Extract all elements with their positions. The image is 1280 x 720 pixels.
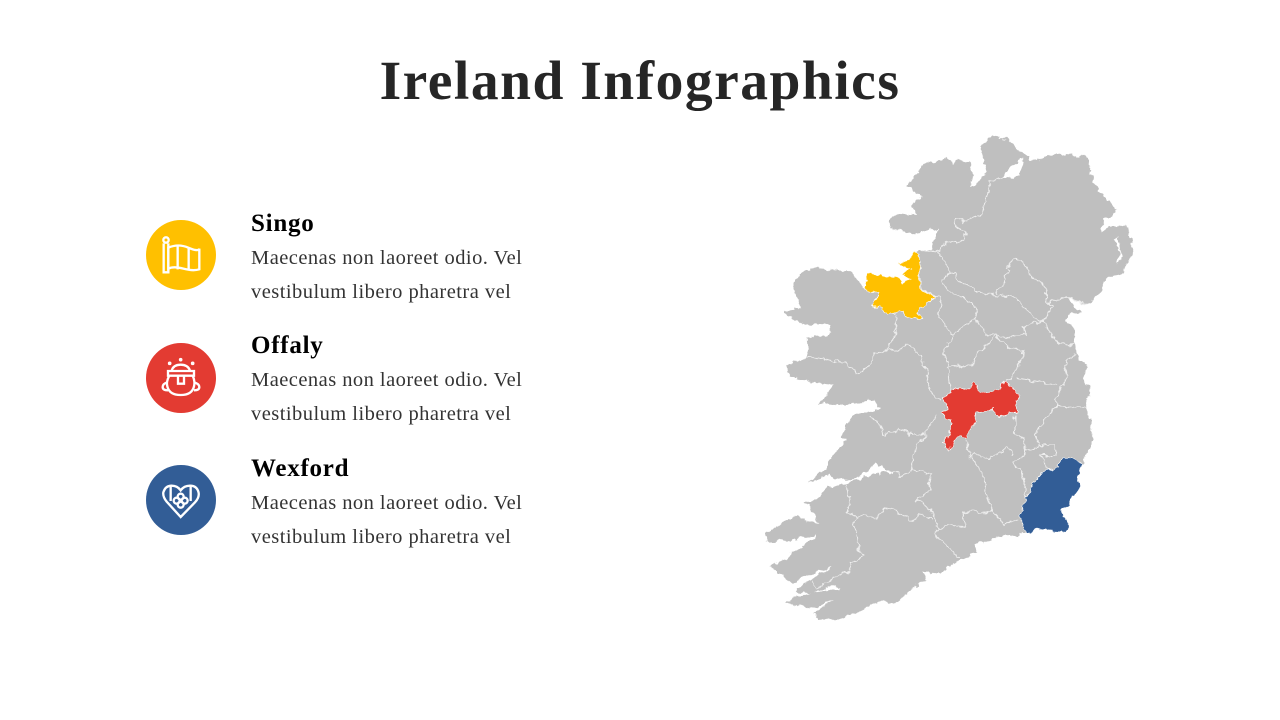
text block: Wexford: Wexford — [251, 455, 349, 482]
text block: Singo: Singo — [251, 210, 315, 237]
map: Lough Foyle and Strangford Lough — [1000, 159, 1122, 263]
text block: Offaly — [251, 332, 522, 425]
map: Offaly highlighted in red — [942, 382, 1020, 451]
text block: Singo — [251, 210, 522, 303]
text block: Offaly: Offaly — [251, 332, 324, 359]
text block: Offaly: Maecenas non laoreet odio. Vel — [251, 369, 522, 391]
text block: Wexford: vestibulum libero pharetra vel — [251, 526, 511, 548]
map: county borders — [807, 177, 1087, 588]
text block: Offaly: vestibulum libero pharetra vel — [251, 403, 511, 425]
map: Wexford highlighted in blue — [1019, 458, 1083, 534]
title: Ireland Infographics — [380, 51, 900, 112]
text block: Wexford: Maecenas non laoreet odio. Vel — [251, 492, 522, 514]
text block: Singo: Maecenas non laoreet odio. Vel — [251, 247, 522, 269]
map: island outline in grey — [766, 135, 1134, 620]
text block: Wexford — [251, 455, 522, 548]
map: Sligo highlighted in yellow — [864, 252, 934, 320]
text block: Singo: vestibulum libero pharetra vel — [251, 281, 511, 303]
